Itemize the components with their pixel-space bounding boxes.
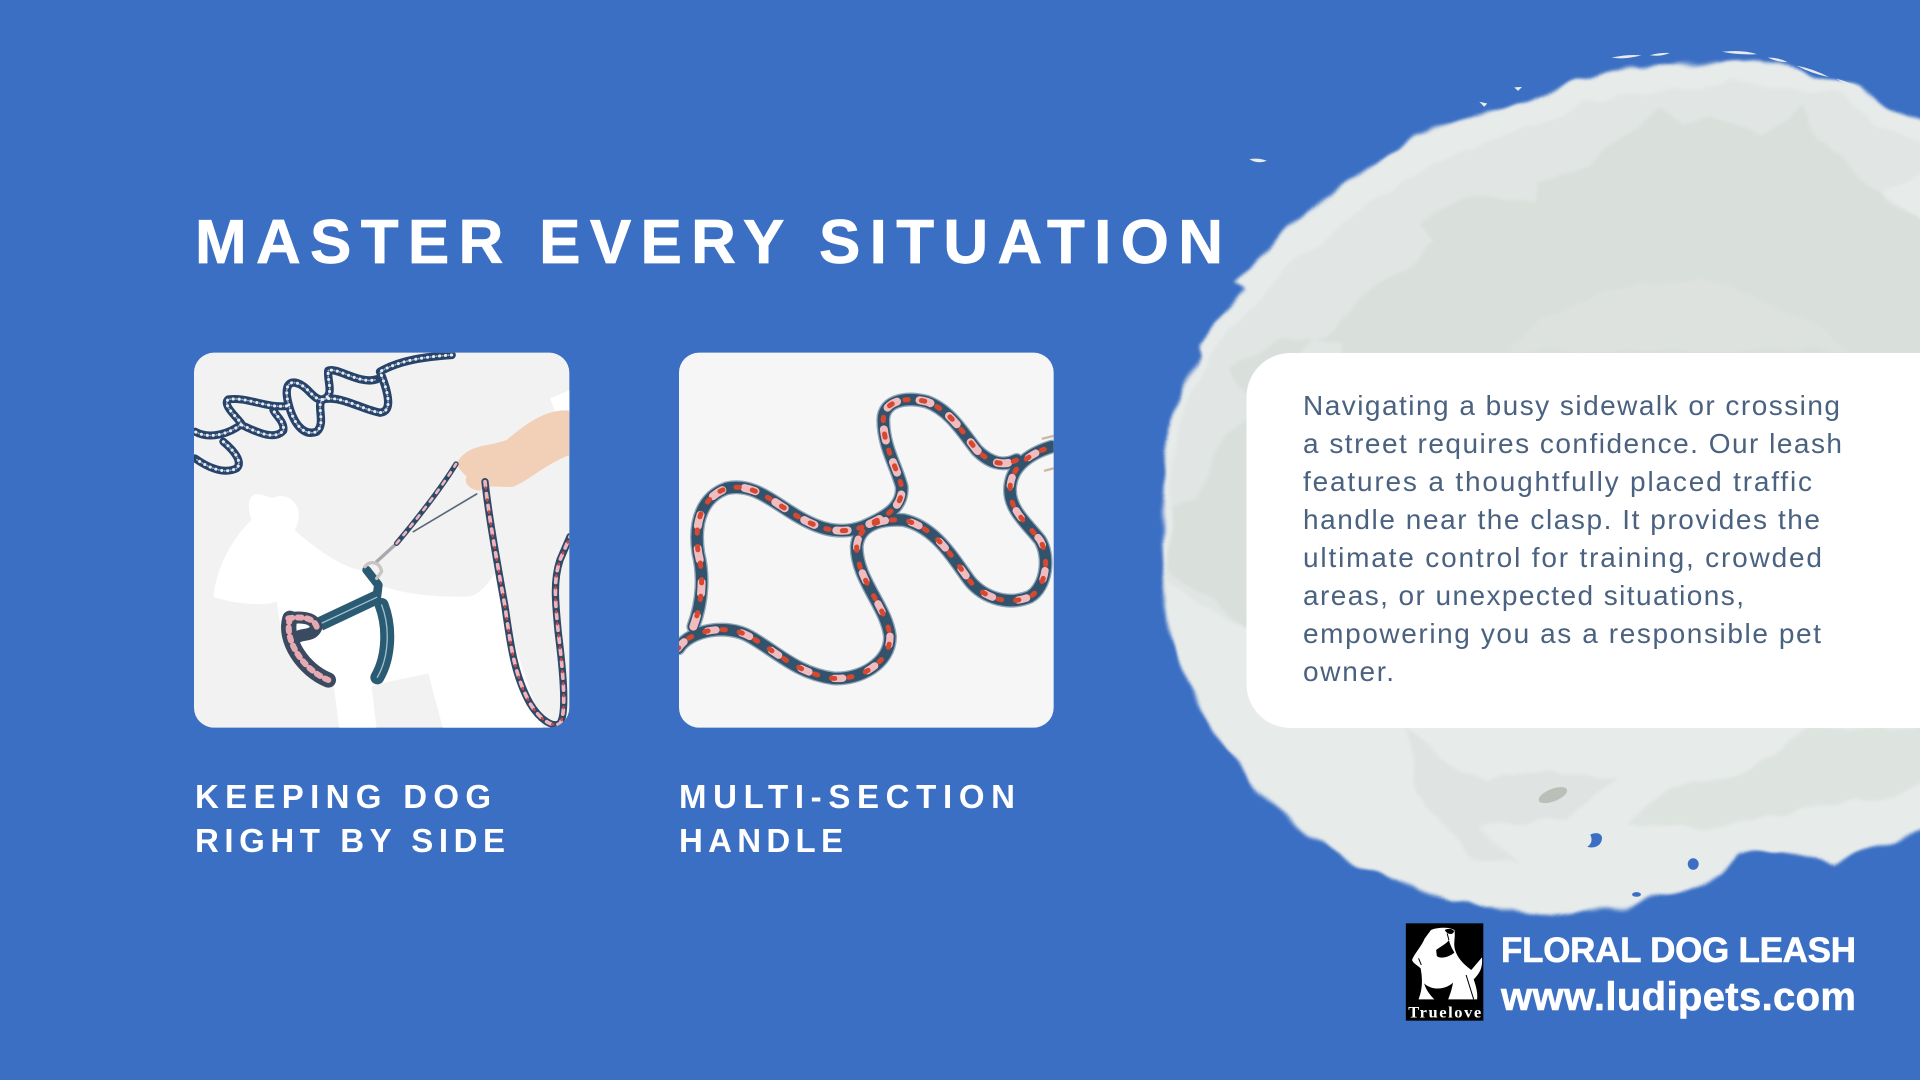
description text: owner. <box>1303 656 1394 687</box>
caption: keeping dog right by side: KEEPING DOG <box>195 778 491 815</box>
description text: Navigating a busy sidewalk or crossing <box>1303 390 1840 421</box>
brand text <box>1500 931 1856 1019</box>
navy leash in background <box>287 355 452 433</box>
logo: Truelove dog: Truelove <box>1408 1004 1481 1021</box>
mannequin dog <box>213 494 543 730</box>
brand text: FLORAL DOG LEASH <box>1501 931 1856 970</box>
paint blob <box>1161 51 1920 915</box>
logo: Truelove dog <box>1406 923 1483 1021</box>
caption: keeping dog right by side <box>195 778 505 859</box>
photo card: mannequin dog with leash <box>194 353 570 730</box>
description text: ultimate control for training, crowded <box>1303 542 1822 573</box>
caption: multi-section handle: HANDLE <box>679 822 843 859</box>
description text: features a thoughtfully placed traffic <box>1303 466 1812 497</box>
description text: handle near the clasp. It provides the <box>1303 504 1820 535</box>
harness <box>320 597 377 624</box>
caption: multi-section handle <box>679 778 1015 859</box>
caption: multi-section handle: MULTI-SECTION <box>679 778 1015 815</box>
caption: keeping dog right by side: RIGHT BY SIDE <box>195 822 505 859</box>
description text: empowering you as a responsible pet <box>1303 618 1821 649</box>
hand and sleeve <box>550 390 570 413</box>
photo card: floral leash <box>678 353 1054 728</box>
description text <box>1303 390 1842 687</box>
brand text: www.ludipets.com <box>1500 975 1856 1019</box>
description text: areas, or unexpected situations, <box>1303 580 1744 611</box>
description card <box>1246 353 1920 728</box>
foreground leash <box>413 494 477 532</box>
description text: a street requires confidence. Our leash <box>1303 428 1842 459</box>
title: MASTER EVERY SITUATION <box>195 208 1223 277</box>
